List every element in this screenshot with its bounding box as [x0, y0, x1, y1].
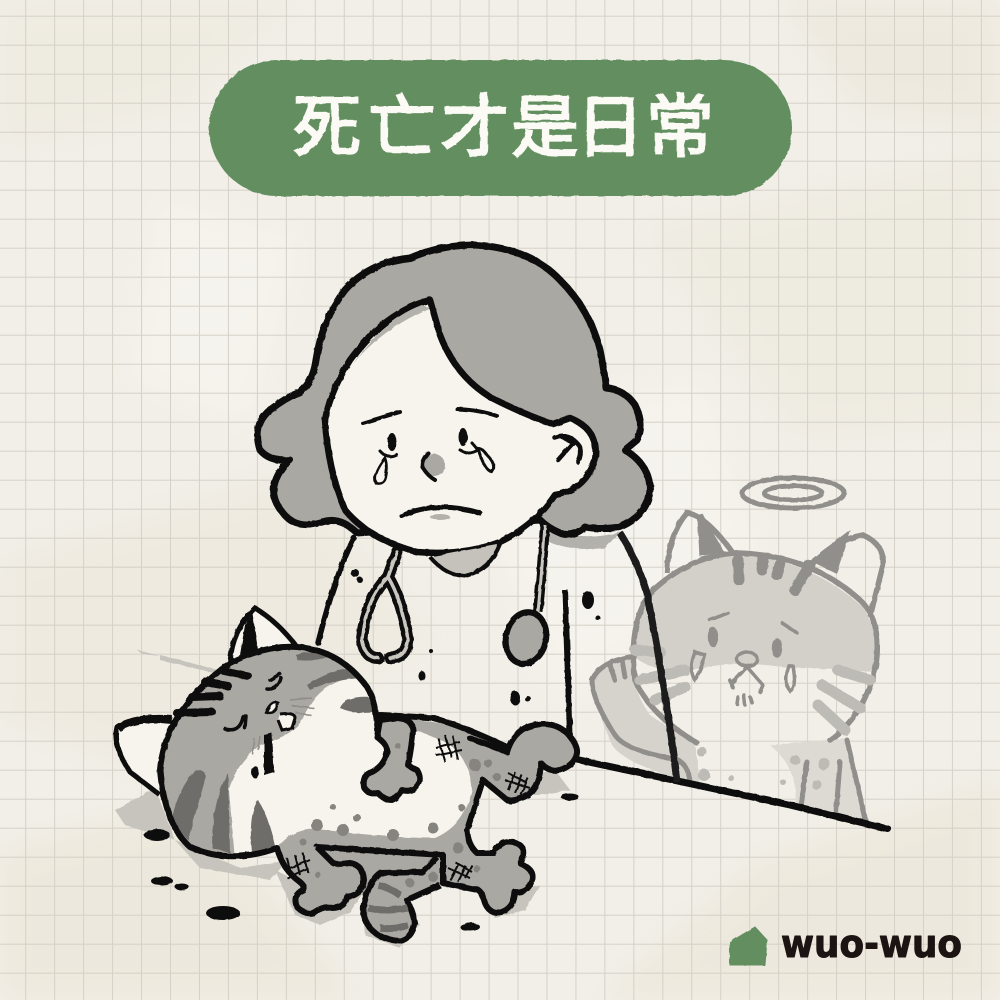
coat blood spots — [351, 569, 600, 705]
title text: 亡 — [368, 90, 436, 166]
title text: 是 — [511, 90, 579, 166]
right arm line — [620, 533, 677, 782]
left stethoscope tube — [362, 552, 408, 658]
tail — [363, 857, 440, 941]
coat right side line — [565, 590, 570, 735]
coat left shoulder — [318, 538, 354, 643]
rear leg — [277, 847, 364, 913]
brand logo — [730, 922, 962, 966]
exam table line — [570, 758, 888, 829]
cat whiskers — [253, 698, 314, 755]
top ear — [230, 608, 297, 663]
blood from mouth — [264, 733, 274, 775]
house icon — [730, 927, 767, 965]
collar — [430, 544, 500, 576]
ear lines — [555, 436, 581, 462]
ghost head tone — [632, 553, 877, 672]
hair — [258, 245, 650, 535]
cat body tone — [277, 718, 577, 941]
hairline shadow — [352, 305, 430, 365]
ghost forehead stripes — [738, 558, 810, 590]
front leg and paw outline — [317, 724, 577, 912]
title banner — [209, 60, 792, 196]
tail stripes — [368, 885, 408, 929]
halo — [742, 478, 844, 508]
cat head outline — [160, 647, 378, 856]
cat black stripes — [177, 671, 248, 713]
ghost face — [692, 613, 797, 705]
ghost legs — [770, 738, 864, 822]
banner pill — [209, 60, 792, 196]
ghost paw and leg lines — [592, 657, 866, 822]
face — [325, 300, 596, 553]
cat cast shadows — [115, 650, 570, 948]
ghost cat with halo — [592, 478, 883, 822]
coat shadow under hair — [540, 522, 620, 549]
title text: 死 — [293, 90, 361, 166]
left ear — [116, 717, 172, 795]
wound hatches — [285, 735, 530, 882]
dead cat on table — [115, 608, 579, 948]
cat closed eyes — [225, 674, 281, 730]
cat head tone — [160, 647, 378, 856]
veterinarian — [258, 245, 888, 829]
eyes — [388, 428, 468, 451]
fur spots — [300, 743, 501, 888]
floor blood spots — [144, 794, 579, 931]
title text: 才 — [441, 90, 509, 166]
cat white belly and face — [229, 677, 472, 860]
title text: 日 — [576, 90, 644, 166]
back outline — [381, 715, 507, 747]
ghost head outline — [633, 553, 877, 743]
blood drop — [251, 766, 259, 778]
right stethoscope tube — [538, 525, 545, 612]
cat nose and mouth — [266, 702, 295, 730]
ghost paw — [592, 657, 700, 785]
belly arm — [364, 718, 420, 800]
mouth — [402, 507, 480, 516]
eyebrows — [363, 409, 497, 423]
stethoscope chest piece — [501, 608, 551, 668]
nose — [423, 454, 445, 476]
tears — [375, 443, 494, 483]
ghost side stripes — [635, 650, 870, 730]
title text: 常 — [646, 90, 714, 166]
ghost fur spots — [697, 747, 830, 790]
ghost ears — [667, 513, 883, 617]
cat head dark stripes — [172, 652, 378, 853]
wordmark: wuo-wuo — [781, 922, 962, 966]
